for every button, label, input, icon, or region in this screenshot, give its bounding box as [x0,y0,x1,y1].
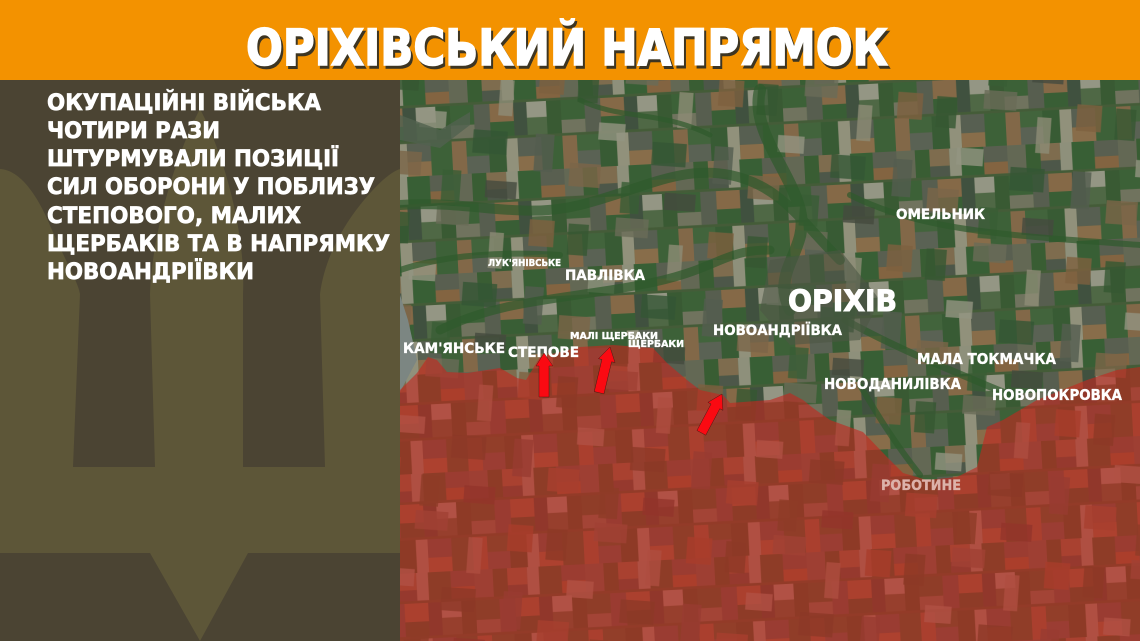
map: satellite view [400,80,1140,641]
terrain: north-west water [400,112,470,148]
arrow: Novoandriivka [694,390,730,437]
terrain: river valleys and settlements [400,90,1140,475]
place labels: ОРІХІВ [788,284,897,318]
place labels: ПАВЛІВКА [565,268,645,284]
body text: СИЛ ОБОРОНИ У ПОБЛИЗУ [47,175,375,200]
body text: ЧОТИРИ РАЗИ [47,119,220,144]
place labels: НОВОАНДРІЇВКА [713,322,842,339]
terrain: reservoir at west edge [400,295,417,392]
place labels: НОВОДАНИЛІВКА [824,375,961,393]
terrain: Orikhiv town [760,250,880,345]
body text: СТЕПОВОГО, МАЛИХ [47,204,301,229]
body text: ШТУРМУВАЛИ ПОЗИЦІЇ [47,146,339,172]
body text [47,90,390,285]
title: ОРІХІВСЬКИЙ НАПРЯМОК [246,18,888,77]
left panel [0,80,400,641]
place labels: НОВОПОКРОВКА [992,386,1122,404]
header bar [0,0,1140,80]
body text: ОКУПАЦІЙНІ ВІЙСЬКА [47,90,321,116]
place labels: ЩЕРБАКИ [628,339,684,350]
occupied territory [400,345,1140,641]
place labels: МАЛА ТОКМАЧКА [917,350,1056,368]
place labels: ОМЕЛЬНИК [896,207,986,223]
arrow: Stepove [536,353,553,397]
trident emblem [0,109,400,641]
body text: ЩЕРБАКІВ ТА В НАПРЯМКУ [47,232,390,257]
place labels: КАМ'ЯНСЬКЕ [403,341,505,357]
place labels: ЛУК'ЯНІВСЬКЕ [488,258,561,269]
arrow: Mali Shcherbaky [591,345,618,395]
place labels: СТЕПОВЕ [508,345,579,361]
place labels: РОБОТИНЕ [881,478,961,494]
place labels: МАЛІ ЩЕРБАКИ [570,331,658,342]
place labels [403,207,1122,494]
body text: НОВОАНДРІЇВКИ [47,259,254,285]
